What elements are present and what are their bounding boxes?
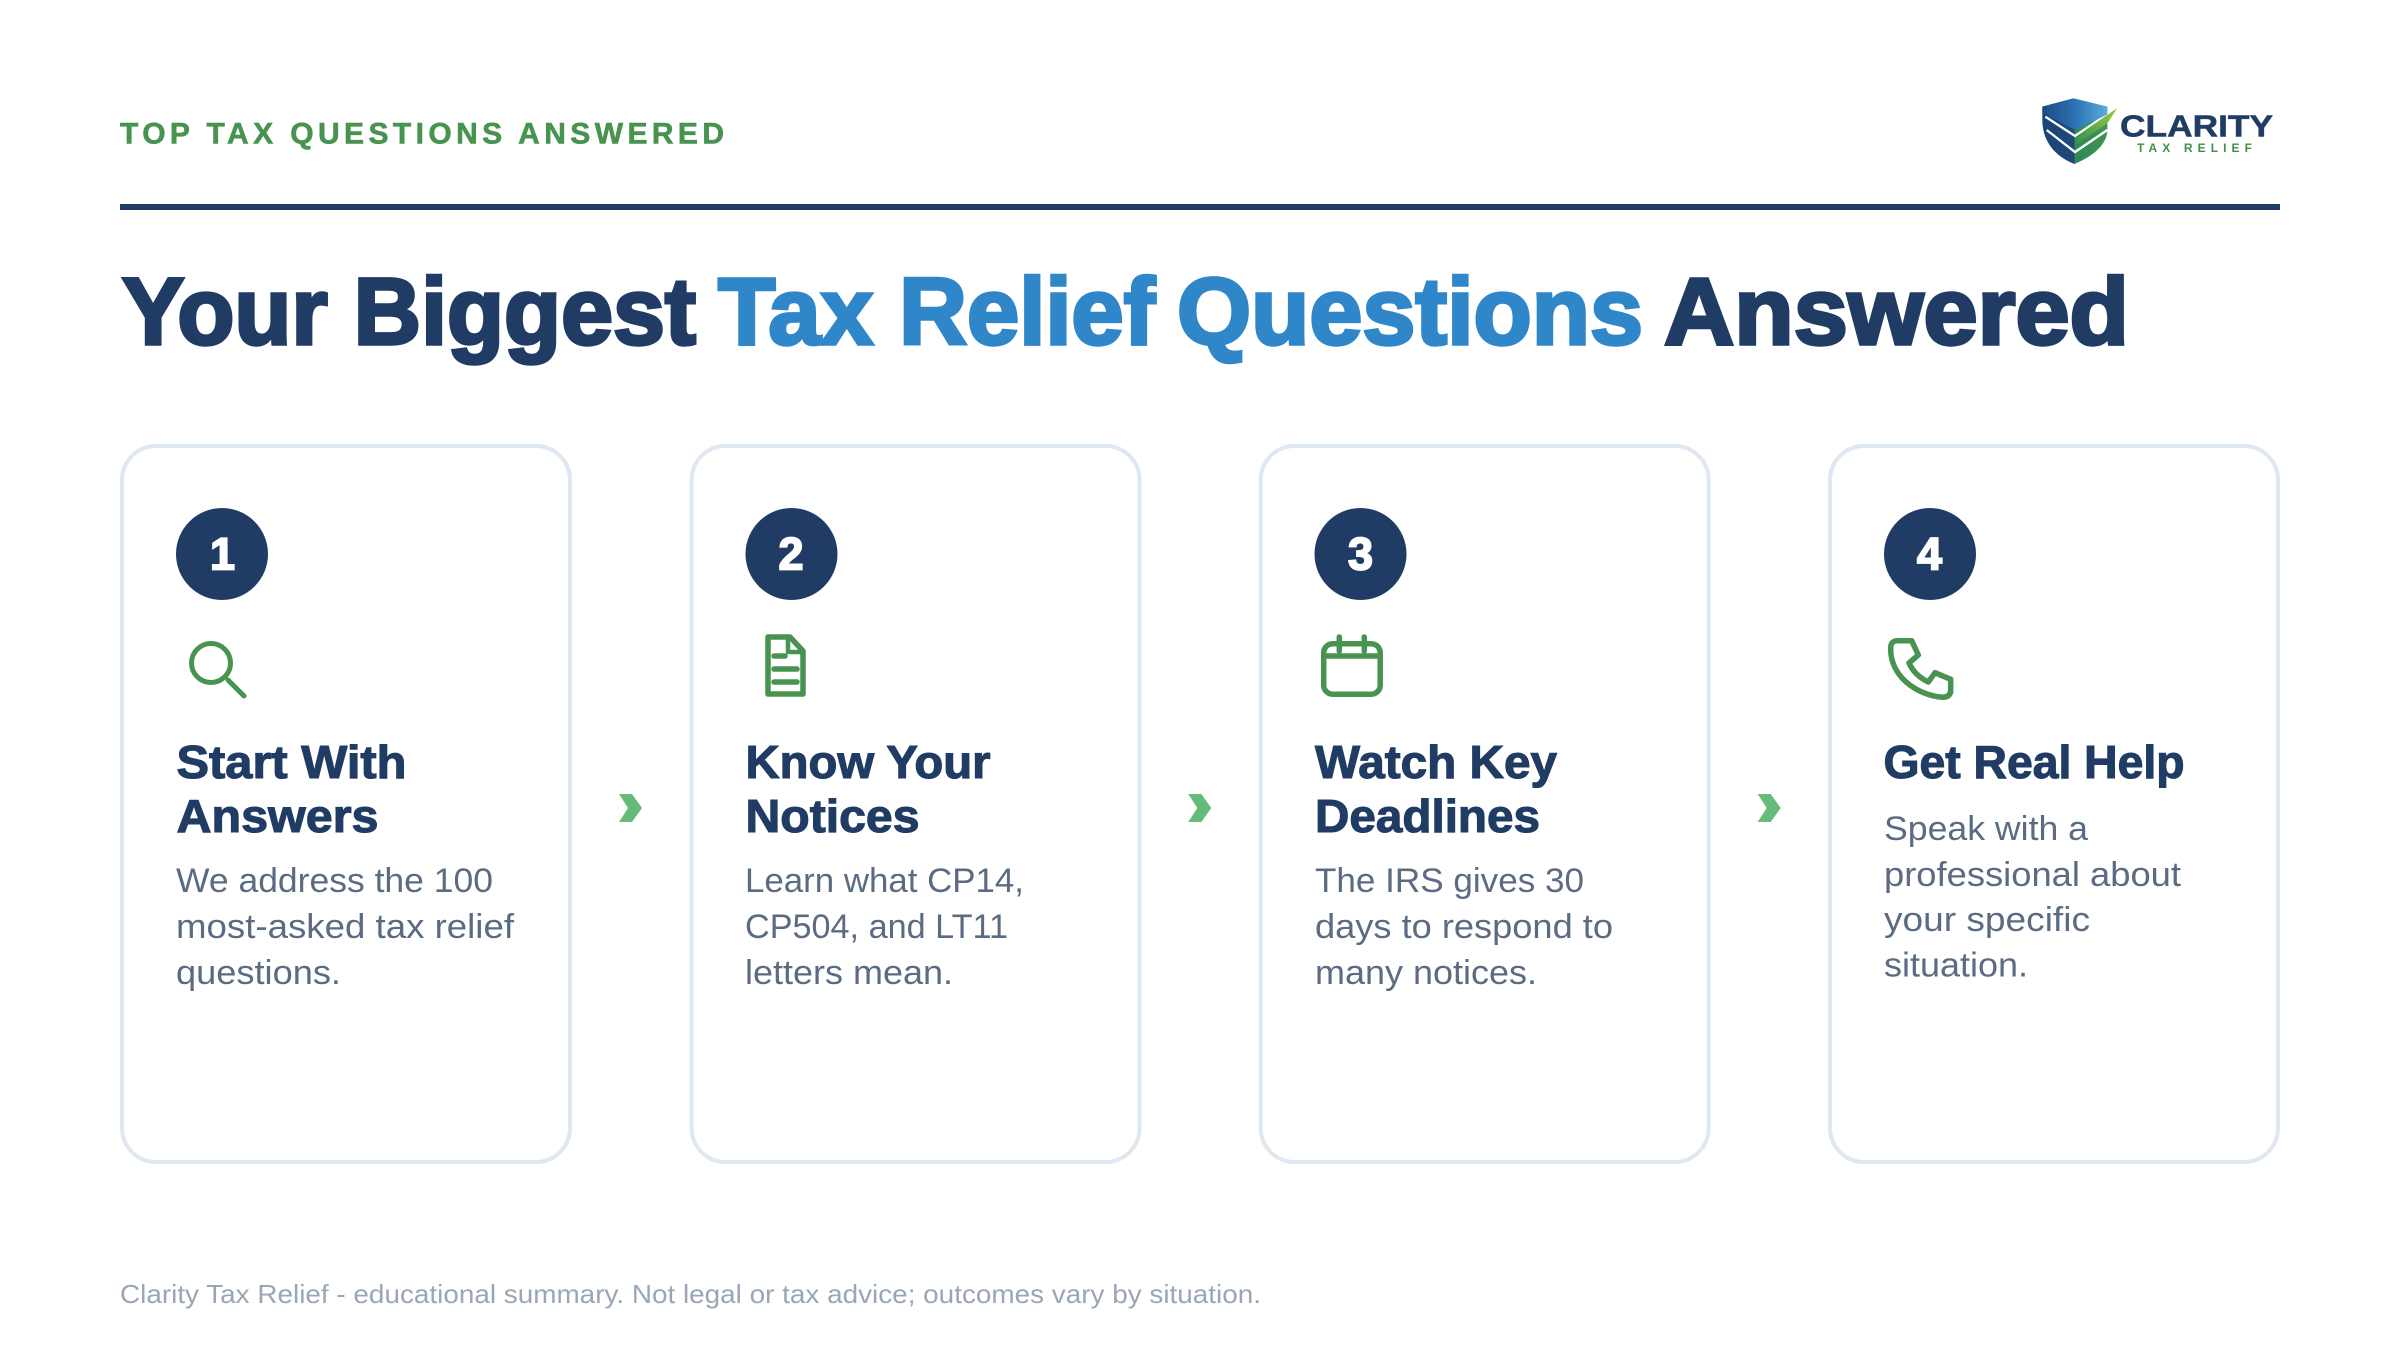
heading: Start With Answers [176, 736, 406, 842]
arrow 1 to 2 [619, 794, 642, 822]
step number 1 [176, 508, 268, 600]
panel: step 1 [122, 446, 570, 1162]
body text: CP504, and LT11 [745, 908, 1008, 946]
logo: Clarity Tax Relief: CLARITY [2120, 108, 2273, 144]
body text [1884, 810, 2182, 984]
step number 1: 1 [210, 528, 235, 580]
step number 2: 2 [778, 528, 804, 580]
body text: letters mean. [745, 954, 953, 992]
panel: step 2 [692, 446, 1140, 1162]
heading: Know Your Notices: Know Your [746, 736, 991, 788]
heading: Know Your Notices: Notices [746, 790, 920, 842]
body text [1315, 862, 1613, 992]
body text: Learn what CP14, [745, 862, 1024, 900]
logo shield icon [2042, 98, 2117, 164]
step number 3 [1314, 508, 1406, 600]
heading: Start With Answers: Answers [176, 790, 378, 842]
heading: Watch Key Deadlines: Deadlines [1315, 790, 1540, 842]
heading: Know Your Notices [746, 736, 991, 842]
body text: most-asked tax relief [176, 908, 515, 946]
step number 4 [1884, 508, 1976, 600]
body text: questions. [176, 954, 341, 992]
logo: Clarity Tax Relief: TAX RELIEF [2137, 141, 2252, 155]
main title: Your Biggest [122, 259, 696, 365]
eyebrow heading: TOP TAX QUESTIONS ANSWERED [120, 118, 724, 150]
step number 4: 4 [1917, 528, 1942, 580]
body text: professional about [1884, 856, 2182, 894]
main title [122, 259, 2129, 365]
main title: Answered [1664, 259, 2129, 365]
heading: Start With Answers: Start With [176, 736, 406, 788]
body text: days to respond to [1315, 908, 1613, 946]
icon: calendar [1324, 637, 1380, 694]
body text: Speak with a [1884, 810, 2088, 848]
main title: Tax Relief [718, 259, 1155, 365]
panel: step 4 [1830, 446, 2278, 1162]
icon: document [768, 637, 803, 694]
logo: Clarity Tax Relief [2042, 98, 2273, 164]
body text: your specific [1884, 901, 2090, 939]
icon: magnifying glass [192, 644, 244, 696]
footer disclaimer: Clarity Tax Relief - educational summary. Not legal or tax advice; outcomes vary by situation. [120, 1279, 1261, 1309]
panel: step 3 [1261, 446, 1709, 1162]
heading: Watch Key Deadlines [1315, 736, 1557, 842]
body text [176, 862, 515, 992]
main title: Questions [1177, 259, 1643, 365]
body text: The IRS gives 30 [1315, 862, 1584, 900]
header rule [120, 204, 2280, 210]
step number 3: 3 [1348, 528, 1373, 580]
body text: many notices. [1315, 954, 1537, 992]
body text [745, 862, 1024, 992]
body text: We address the 100 [176, 862, 493, 900]
arrow 2 to 3 [1188, 794, 1211, 822]
step number 2 [746, 508, 838, 600]
heading: Get Real Help: Get Real Help [1884, 736, 2184, 788]
arrow 3 to 4 [1758, 794, 1781, 822]
icon: phone [1891, 641, 1951, 697]
body text: situation. [1884, 946, 2028, 984]
heading: Watch Key Deadlines: Watch Key [1315, 736, 1557, 788]
